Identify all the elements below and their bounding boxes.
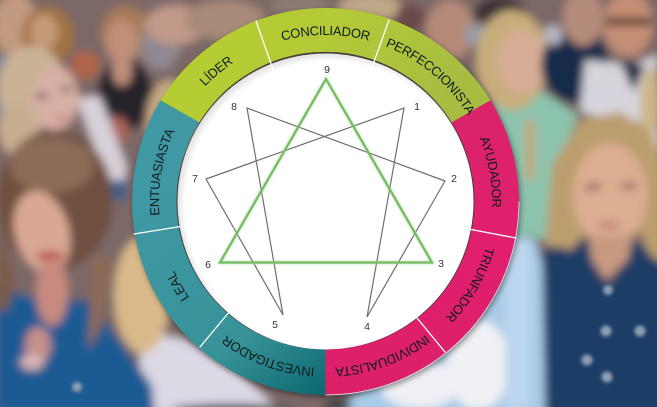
denim buttons [72,285,646,392]
label: Entusiasta: ENTUASIASTA [150,130,174,215]
blonde woman, left [76,96,126,188]
label: Perfeccionista: PERFECCIONISTA [386,38,474,116]
right woman [542,240,657,407]
label: Lider: LÍDER [200,56,233,86]
point numbers [192,64,457,333]
ring segment: pink [326,100,519,395]
number 2: 2 [451,173,457,185]
label: Triunfador: TRIUNFADOR [446,249,494,322]
label: Conciliador: CONCILIADOR [282,26,370,40]
number 7: 7 [192,173,198,185]
number 4: 4 [364,321,370,333]
label: Ayudador: AYUDADOR [480,138,501,208]
blonde hair and white shirt near wheel [140,330,285,407]
label: Individualista: INDIVIDUALISTA [335,335,430,376]
blonde woman, teal top [490,90,578,240]
enneagram wheel [132,8,520,396]
man in dark jacket [541,27,609,103]
man with sunglasses [580,55,657,125]
segment labels [150,26,501,376]
wheel drop shadow [134,10,520,398]
ring segment: green [160,8,490,122]
number 1: 1 [414,101,420,113]
green triangle glow [220,79,432,262]
outer rim highlight [326,202,519,395]
inner white disc [178,54,474,350]
label: Investigador: INVESTIGADOR [222,336,314,376]
segment separators [134,20,516,352]
ring segment: teal [132,100,326,395]
number 6: 6 [205,259,211,271]
light blue shirt, center right [330,235,552,407]
number 8: 8 [231,101,237,113]
enneagram green triangle [220,79,432,262]
number 9: 9 [324,64,330,76]
number 5: 5 [272,319,278,331]
dark haired woman [0,285,155,407]
enneagram hexad lines [206,108,445,317]
number 3: 3 [438,258,444,270]
label: Leal: LEAL [168,270,189,302]
top row of the crowd [0,0,37,57]
